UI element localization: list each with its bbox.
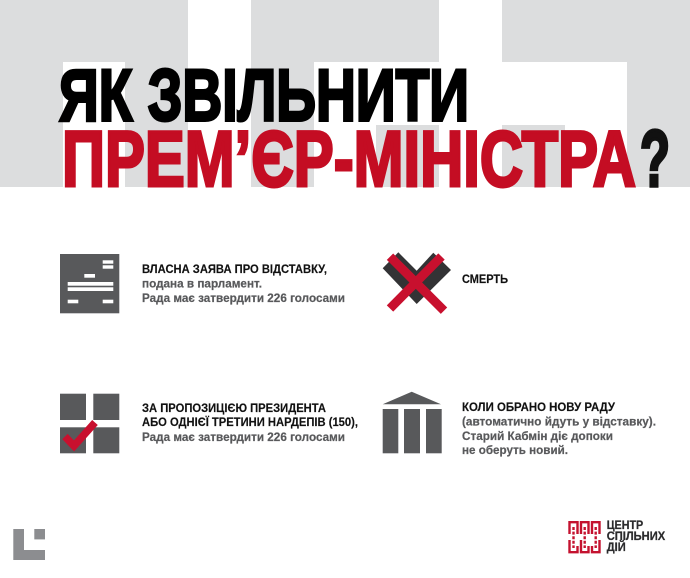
logo wordmark: ДІЙ	[607, 541, 626, 554]
text block: new parliament: (автоматично йдуть у відставку).	[462, 416, 656, 428]
title line 1: ЯК ЗВІЛЬНИТИ	[59, 56, 469, 136]
background: grey block pattern	[0, 0, 690, 187]
text block: president proposal	[142, 403, 358, 444]
text block: president proposal: ЗА ПРОПОЗИЦІЄЮ ПРЕЗИДЕНТА	[142, 403, 326, 415]
text block: own resignation: Рада має затвердити 226 голосами	[142, 293, 345, 305]
icon: document	[60, 254, 119, 313]
logo wordmark: СПІЛЬНИХ	[607, 531, 666, 543]
icon: parliament building	[383, 392, 442, 453]
text block: new parliament: Старий Кабмін діє допоки	[462, 431, 613, 443]
title	[59, 56, 670, 203]
text block: death: СМЕРТЬ	[462, 274, 508, 286]
text block: new parliament	[462, 402, 656, 457]
text block: own resignation: ВЛАСНА ЗАЯВА ПРО ВІДСТАВКУ,	[142, 264, 327, 276]
text block: president proposal: Рада має затвердити 226 голосами	[142, 432, 345, 444]
text block: own resignation	[142, 264, 345, 305]
logo wordmark: ЦЕНТР	[607, 520, 644, 532]
title question mark: ?	[640, 114, 670, 203]
logo: Центр спільних дій	[570, 520, 666, 554]
text block: new parliament: не оберуть новий.	[462, 445, 568, 457]
logo emblem	[570, 522, 600, 552]
text block: president proposal: АБО ОДНІЄЇ ТРЕТИНИ НАРДЕПІВ (150),	[142, 416, 358, 429]
logo: bottom-left mark	[13, 529, 45, 560]
logo wordmark	[607, 520, 666, 554]
icon: four squares with check mark	[60, 394, 119, 453]
text block: new parliament: КОЛИ ОБРАНО НОВУ РАДУ	[462, 402, 616, 414]
icon: crossed heart	[383, 252, 451, 311]
text block: own resignation: подана в парламент.	[142, 278, 262, 290]
